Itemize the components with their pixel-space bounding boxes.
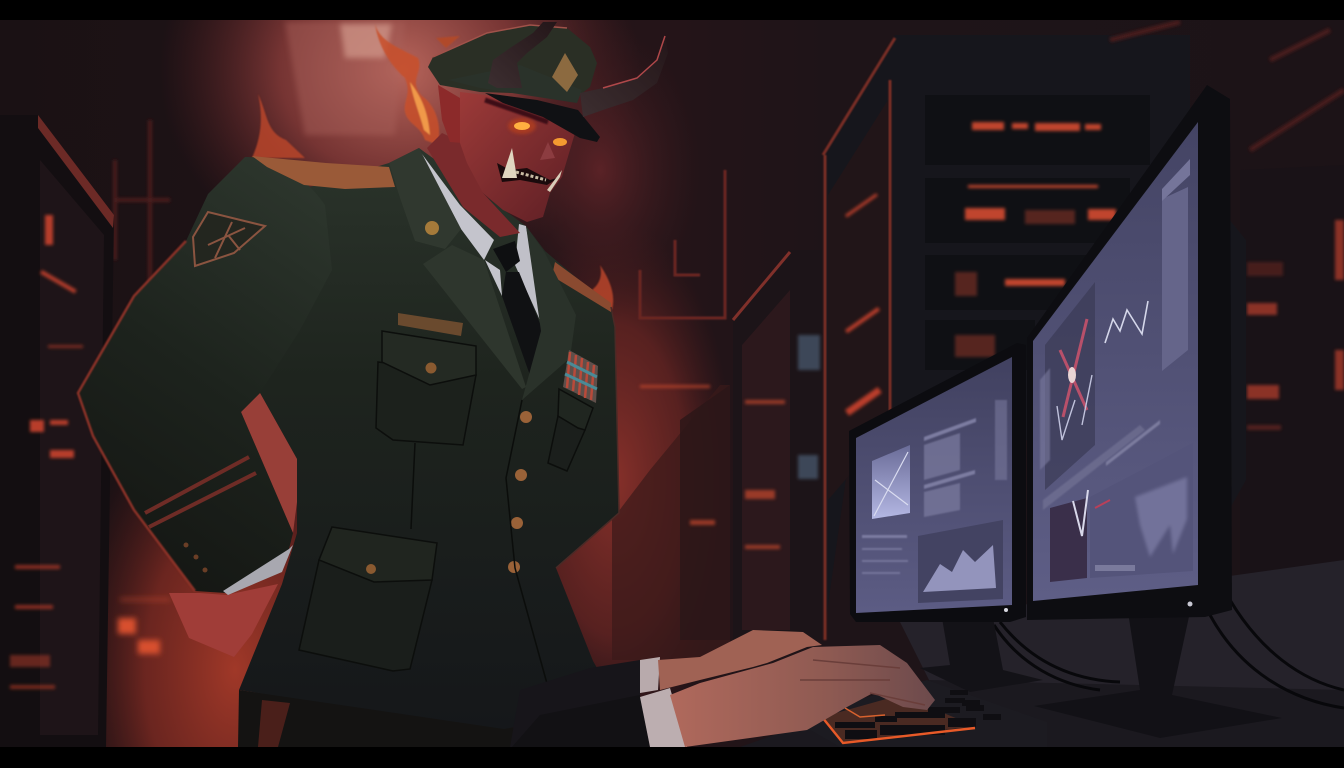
lower back wall behind monitors bbox=[900, 560, 1344, 692]
monitor stand bbox=[920, 618, 1043, 692]
left server rack bbox=[0, 115, 114, 747]
lapels bbox=[389, 148, 461, 249]
desk bbox=[740, 680, 1344, 747]
cap badge bbox=[552, 53, 578, 92]
mouth and fangs bbox=[497, 148, 562, 192]
small monitor bbox=[849, 343, 1043, 692]
horns bbox=[488, 22, 557, 88]
jacket buttons bbox=[508, 411, 532, 573]
peaked cap bbox=[428, 22, 668, 142]
red gap between arm and body bbox=[241, 393, 297, 533]
suit sleeves and cuffs bbox=[510, 657, 687, 747]
ear bbox=[438, 85, 470, 143]
small monitor screen bbox=[856, 357, 1012, 613]
mid distance server racks bbox=[612, 250, 822, 660]
head bbox=[438, 85, 577, 222]
officer trousers bbox=[238, 690, 545, 747]
monitor stand bbox=[1034, 612, 1282, 738]
window light bbox=[285, 22, 405, 135]
glowing eyes bbox=[508, 118, 567, 146]
right chest pocket bbox=[548, 389, 593, 471]
epaulette bbox=[252, 156, 395, 189]
name plate bbox=[398, 313, 463, 336]
large monitor bbox=[1027, 85, 1282, 738]
monitor cables bbox=[994, 600, 1344, 708]
collar pin bbox=[425, 221, 439, 235]
left arm sleeve bbox=[78, 157, 332, 593]
medal ribbons bbox=[563, 350, 598, 403]
chest pocket bbox=[376, 331, 476, 445]
right background server rack bbox=[1110, 22, 1344, 747]
shoulder patch bbox=[193, 212, 265, 266]
flames behind officer bbox=[252, 24, 613, 310]
shirt and tie bbox=[419, 150, 543, 381]
hand behind back bbox=[169, 584, 278, 657]
jacket body bbox=[239, 148, 619, 729]
lower pocket bbox=[299, 527, 437, 671]
right arm outline bbox=[556, 307, 619, 568]
neck bbox=[427, 133, 520, 237]
large monitor screen bbox=[1033, 122, 1198, 601]
large background server rack bbox=[823, 35, 1190, 640]
background glowing lights lower left bbox=[118, 598, 170, 654]
keyboard bbox=[807, 680, 1047, 747]
hands on keyboard bbox=[658, 630, 935, 747]
officer bbox=[78, 22, 668, 747]
placket line bbox=[411, 400, 556, 716]
